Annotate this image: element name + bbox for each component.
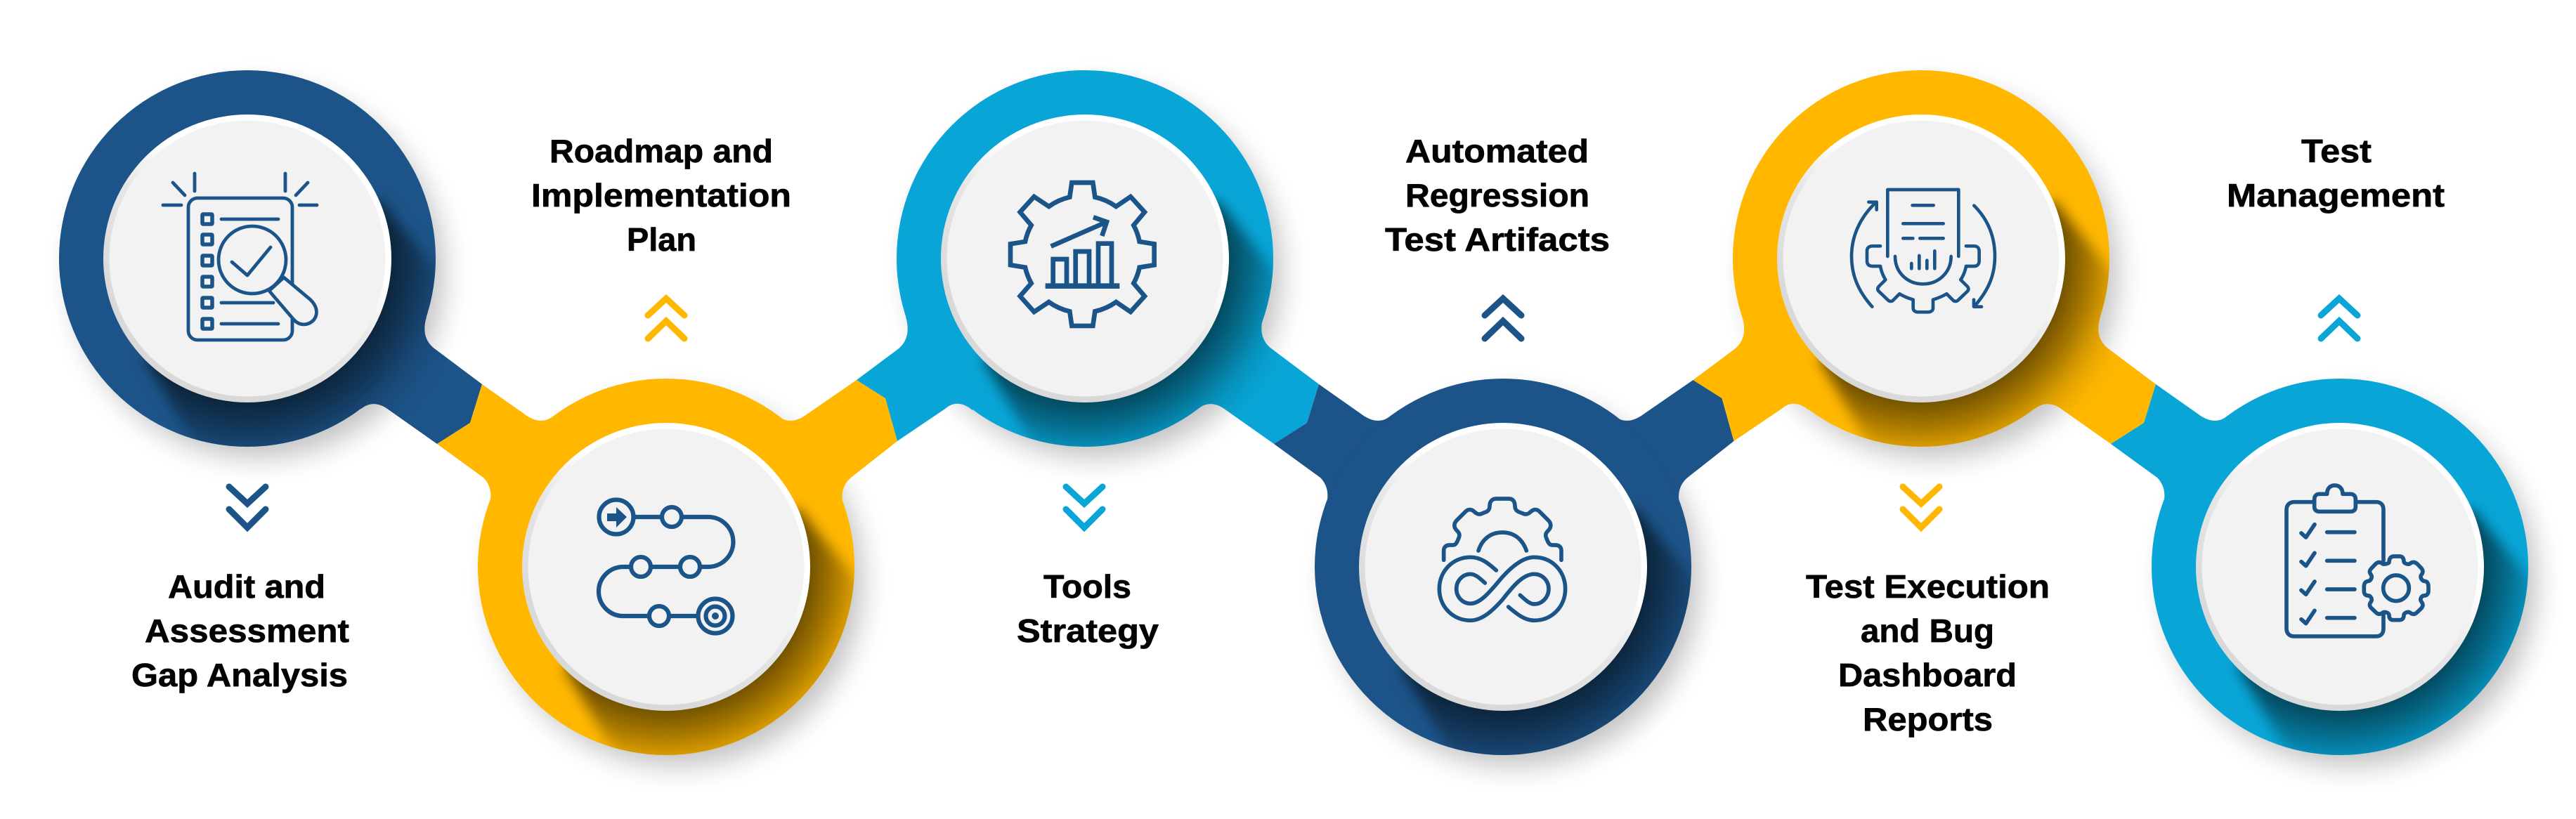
chevrons: step 1 down: [229, 487, 266, 528]
connector arms between steps: [247, 258, 2340, 567]
label: Test Execution and Bug Dashboard Reports: Test Execution: [1806, 568, 2050, 605]
label: Automated Regression Test Artifacts: Test Artifacts: [1385, 221, 1610, 258]
icon: checklist with magnifier: [163, 173, 317, 340]
icon: gear with bar chart: [1010, 183, 1154, 326]
label: Audit and Assessment Gap Analysis: [131, 568, 349, 693]
panel: step 4 automation circle: [1315, 379, 1691, 755]
label: Test Execution and Bug Dashboard Reports: Reports: [1863, 701, 1993, 738]
label: Automated Regression Test Artifacts: [1385, 133, 1610, 258]
label: Test Execution and Bug Dashboard Reports: and Bug: [1861, 612, 1994, 649]
label: Roadmap and Implementation Plan: [531, 133, 791, 258]
panel: step 1 audit circle: [59, 70, 436, 447]
panel: step 2 roadmap circle: [478, 379, 854, 755]
chevrons: step 6 up: [2321, 299, 2357, 339]
chevrons: step 2 up: [648, 299, 684, 339]
panel: step 5 execution circle: [1733, 70, 2111, 447]
label: Test Execution and Bug Dashboard Reports: [1806, 568, 2050, 738]
panel: step 6 management circle: [2152, 379, 2528, 755]
label: Tools Strategy: Strategy: [1017, 612, 1159, 649]
chevrons: step 3 down: [1066, 487, 1102, 528]
icon: gear with infinity loop: [1439, 499, 1566, 620]
label: Roadmap and Implementation Plan: Implementation: [531, 177, 791, 214]
label: Roadmap and Implementation Plan: Roadmap and: [549, 133, 773, 169]
icon: clipboard checklist with gear: [2286, 485, 2428, 636]
label: Automated Regression Test Artifacts: Automated: [1405, 133, 1589, 169]
label: Audit and Assessment Gap Analysis: Audit and: [168, 568, 325, 605]
label: Audit and Assessment Gap Analysis: Gap Analysis: [131, 657, 348, 693]
chevrons: step 4 up: [1485, 299, 1521, 339]
icon: report document with gear and arrows: [1852, 190, 1995, 312]
label: Test Management: Test: [2301, 133, 2372, 169]
label: Test Management: Management: [2227, 177, 2445, 214]
label: Automated Regression Test Artifacts: Regression: [1405, 177, 1589, 214]
label: Tools Strategy: [1017, 568, 1159, 649]
label: Test Management: [2227, 133, 2445, 214]
label: Roadmap and Implementation Plan: Plan: [627, 221, 696, 258]
panel: step 3 tools circle: [897, 70, 1273, 447]
label: Audit and Assessment Gap Analysis: Assessment: [145, 612, 349, 649]
label: Tools Strategy: Tools: [1043, 568, 1131, 605]
label: Test Execution and Bug Dashboard Reports: Dashboard: [1838, 657, 2017, 693]
chevrons: step 5 down: [1903, 487, 1939, 528]
icon: route path with nodes: [599, 500, 734, 634]
